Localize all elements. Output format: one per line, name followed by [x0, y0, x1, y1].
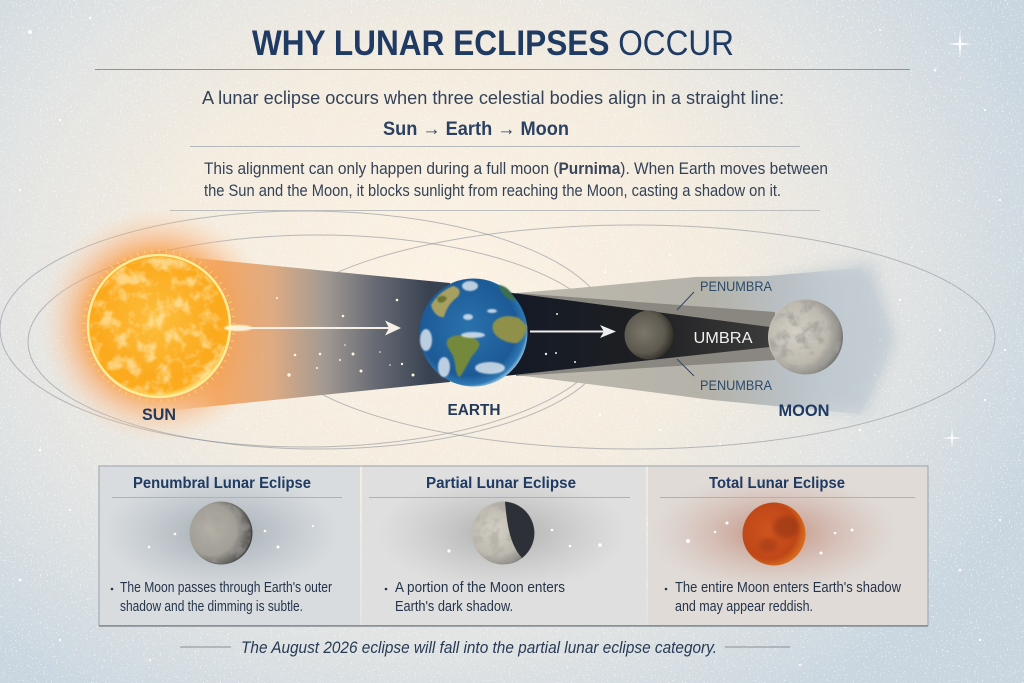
- earth-to-moon arrow: [530, 325, 616, 338]
- shadowed moon: [624, 310, 674, 360]
- continents: [431, 285, 527, 377]
- panel: total: [648, 466, 928, 625]
- red moon: [742, 502, 806, 566]
- sun glow: [40, 207, 276, 443]
- label: moon: MOON: [778, 401, 830, 420]
- sun ray arrow: [224, 320, 401, 336]
- label: umbra: UMBRA: [694, 330, 753, 347]
- penumbra outer: [516, 268, 900, 414]
- earth: [420, 278, 528, 386]
- penumbra inner: [516, 293, 775, 376]
- panel stars: [148, 522, 853, 554]
- explanation text: the Sun and the Moon, it blocks sunlight from reaching the Moon, casting a shadow on it.: [204, 181, 781, 200]
- heading: Total Lunar Eclipse: [709, 475, 845, 492]
- sun: [84, 251, 234, 401]
- description: The Moon passes through Earth's outer: [120, 580, 332, 596]
- description: shadow and the dimming is subtle.: [120, 599, 303, 615]
- title: WHY LUNAR ECLIPSES OCCUR: [252, 24, 734, 63]
- title rule: [95, 68, 910, 70]
- label: earth: EARTH: [448, 402, 500, 419]
- description: A portion of the Moon enters: [395, 579, 565, 596]
- penumbra top callout: PENUMBRA: [700, 278, 773, 294]
- partial moon: [472, 502, 534, 564]
- intro text: A lunar eclipse occurs when three celestial bodies align in a straight line:: [202, 87, 784, 108]
- description: and may appear reddish.: [675, 599, 813, 615]
- moon far shadow: [760, 262, 895, 414]
- orbit lines: [0, 211, 995, 449]
- heading: Partial Lunar Eclipse: [426, 475, 576, 492]
- explanation text: [204, 159, 828, 200]
- panel: partial: [362, 466, 646, 625]
- description: [665, 580, 901, 615]
- alignment line: Sun → Earth → Moon: [383, 119, 569, 140]
- heading: Penumbral Lunar Eclipse: [133, 475, 311, 492]
- label: sun: SUN: [142, 405, 176, 424]
- description: [111, 580, 332, 615]
- penumbral moon: [190, 502, 252, 564]
- footer note: The August 2026 eclipse will fall into the partial lunar eclipse category.: [241, 639, 717, 657]
- sun-to-earth shadow cone: [165, 255, 450, 411]
- explanation text: This alignment can only happen during a full moon (Purnima). When Earth moves between: [204, 159, 828, 178]
- panel group: [99, 466, 928, 626]
- umbra: [505, 292, 770, 376]
- clouds: [420, 281, 505, 377]
- umbra stars: [545, 313, 576, 363]
- panel borders: [99, 466, 928, 626]
- diagram: [40, 207, 900, 443]
- panel: penumbral: [99, 466, 360, 625]
- penumbra top callout: [677, 278, 773, 310]
- description: Earth's dark shadow.: [395, 598, 513, 615]
- penumbra bottom callout: [677, 359, 773, 393]
- penumbra bottom callout: PENUMBRA: [700, 377, 773, 393]
- description: The entire Moon enters Earth's shadow: [675, 580, 901, 596]
- description: [385, 579, 565, 615]
- moon: [768, 300, 843, 374]
- cone stars: [276, 297, 414, 377]
